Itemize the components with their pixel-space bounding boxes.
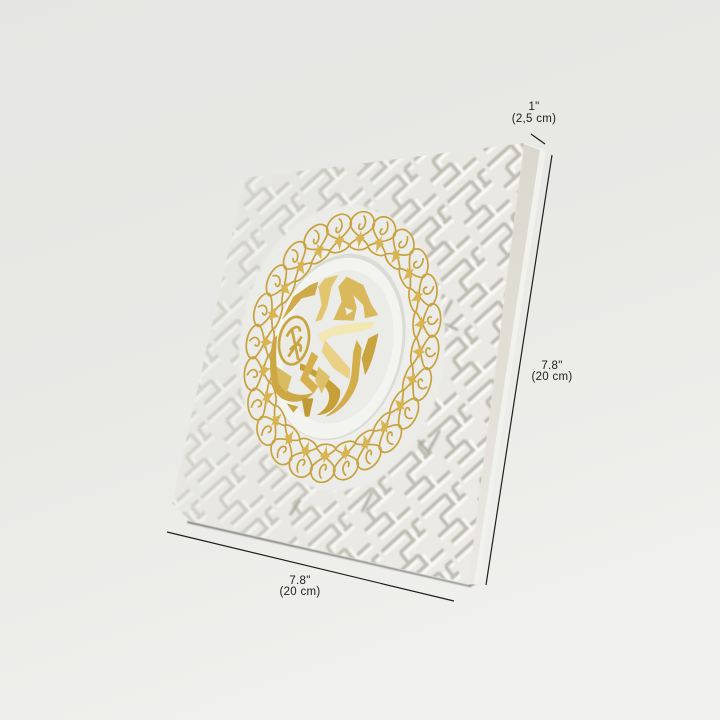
ornamental gold ring [225, 206, 460, 488]
label: width: (20 cm) [279, 586, 321, 598]
label: width: 7.8" [289, 575, 311, 587]
arrow: depth [531, 134, 545, 144]
plaque front face [172, 143, 524, 584]
label: height: (20 cm) [531, 371, 573, 383]
arrow: width [167, 532, 454, 601]
inner white disc [246, 237, 430, 457]
plaque shadow [187, 521, 476, 587]
medallion [225, 206, 460, 488]
arrow: height [486, 155, 552, 585]
label: depth: 1" [528, 101, 540, 113]
label: depth: (2,5 cm) [512, 113, 556, 125]
dimension: depth [512, 101, 556, 144]
plaque [172, 143, 546, 584]
gold calligraphy [270, 275, 378, 417]
label: height: 7.8" [541, 360, 563, 372]
dimension: width [167, 532, 454, 601]
dimension: height [486, 155, 573, 585]
medallion surround [225, 195, 459, 501]
plaque side edge [466, 143, 546, 584]
plaque chamfer [466, 144, 540, 584]
relief pattern [172, 143, 524, 581]
